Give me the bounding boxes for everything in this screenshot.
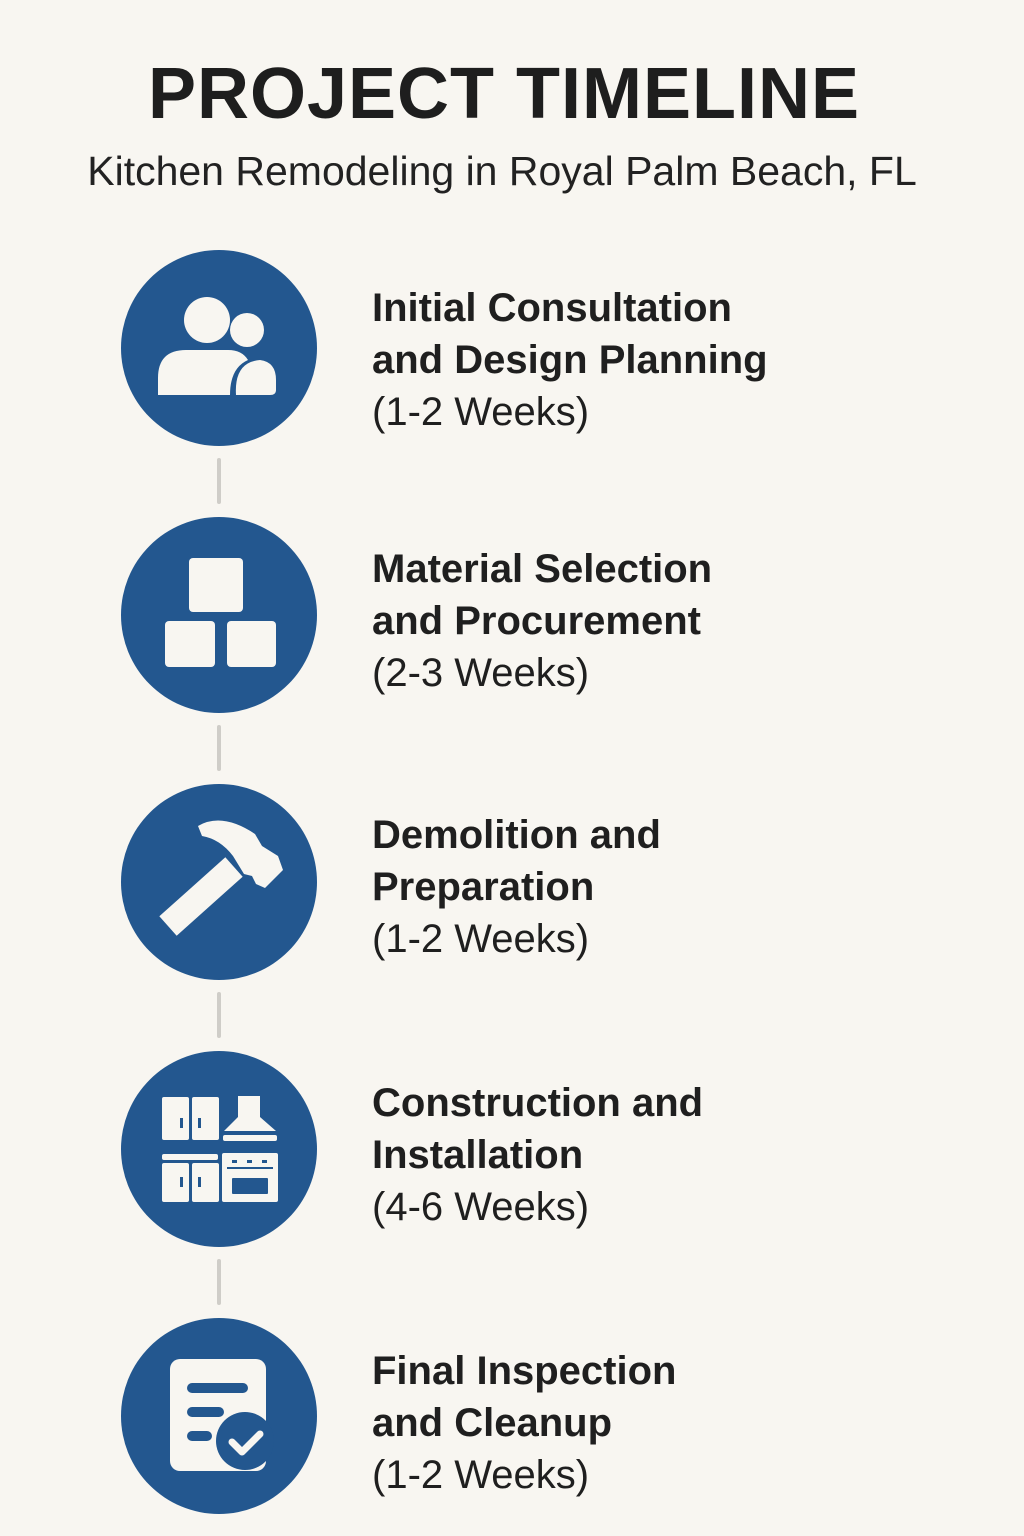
- step 2 text: Material Selection: [372, 547, 712, 591]
- step 1 text: [372, 286, 768, 434]
- icon: checklist: [121, 1318, 317, 1514]
- icon: hammer: [121, 784, 317, 980]
- step 3 text: [372, 813, 661, 961]
- step 3 text: (1-2 Weeks): [372, 917, 589, 961]
- step 3 text: Demolition and: [372, 813, 661, 857]
- step 5 text: (1-2 Weeks): [372, 1453, 589, 1497]
- connector: [217, 725, 221, 771]
- step 4 text: Installation: [372, 1133, 583, 1177]
- step 5 text: Final Inspection: [372, 1349, 676, 1393]
- step 4 text: [372, 1081, 703, 1229]
- step 2 text: (2-3 Weeks): [372, 651, 589, 695]
- step 4 text: (4-6 Weeks): [372, 1185, 589, 1229]
- step 3 text: Preparation: [372, 865, 594, 909]
- step 1 text: Initial Consultation: [372, 286, 732, 330]
- connector: [217, 458, 221, 504]
- step 5 text: and Cleanup: [372, 1401, 612, 1445]
- connector: [217, 992, 221, 1038]
- icon: kitchen: [121, 1051, 317, 1247]
- step 4 text: Construction and: [372, 1081, 703, 1125]
- icon: people: [121, 250, 317, 446]
- step 1 text: and Design Planning: [372, 338, 768, 382]
- icon: blocks: [121, 517, 317, 713]
- title: PROJECT TIMELINE: [148, 54, 860, 134]
- step 5 text: [372, 1349, 676, 1497]
- step 2 text: and Procurement: [372, 599, 701, 643]
- subtitle: Kitchen Remodeling in Royal Palm Beach, FL: [87, 148, 917, 194]
- step 1 text: (1-2 Weeks): [372, 390, 589, 434]
- connector: [217, 1259, 221, 1305]
- step 2 text: [372, 547, 712, 695]
